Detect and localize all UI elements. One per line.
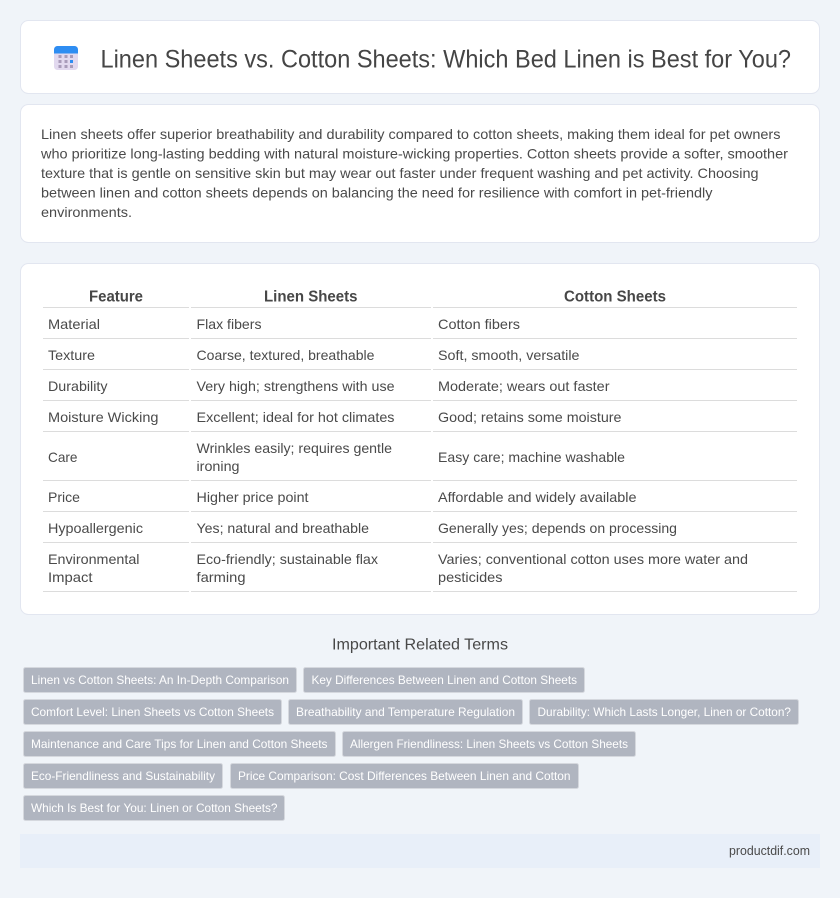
tag: [24, 700, 282, 724]
row: care: Easy care; machine washable: [438, 449, 625, 465]
row: price: [48, 489, 637, 505]
text block: introduction paragraph: texture that is gentle on sensitive skin but may wear out faster under frequent washing and pet activity. Choosing: [41, 165, 758, 181]
row: price: Price: [48, 489, 80, 505]
row: texture: Texture: [48, 347, 95, 363]
row: price: Higher price point: [196, 489, 309, 505]
row: care: [48, 440, 625, 474]
tag: [24, 732, 336, 756]
row: material: Material: [48, 316, 100, 332]
text block: introduction paragraph: [40, 126, 788, 220]
row: moisture wicking: Moisture Wicking: [48, 409, 158, 425]
panel: related term tags: [24, 668, 798, 820]
text block: introduction paragraph: Linen sheets offer superior breathability and durability compared to cotton sheets, making them ideal for pet owners: [41, 126, 780, 142]
row: hypoallergenic: Hypoallergenic: [48, 520, 143, 536]
row: care: ironing: [196, 458, 240, 474]
tag: [230, 764, 578, 788]
row: durability: Very high; strengthens with use: [196, 378, 395, 394]
tag: [24, 796, 284, 820]
row: texture: Soft, smooth, versatile: [438, 347, 580, 363]
row: hypoallergenic: Generally yes; depends on processing: [438, 520, 677, 536]
row: environmental impact: [48, 551, 748, 585]
tag: Breathability and Temperature Regulation: [296, 705, 515, 719]
row: environmental impact: farming: [196, 569, 246, 585]
tag: Price Comparison: Cost Differences Between Linen and Cotton: [238, 769, 570, 783]
row: material: Flax fibers: [196, 316, 262, 332]
row: moisture wicking: Good; retains some moisture: [438, 409, 622, 425]
row: durability: Durability: [48, 378, 108, 394]
row: environmental impact: Environmental: [48, 551, 140, 567]
row: care: Care: [48, 449, 78, 465]
panel: footer: [20, 834, 820, 868]
row: moisture wicking: Excellent; ideal for hot climates: [196, 409, 394, 425]
table header: Feature: [89, 289, 143, 306]
row: moisture wicking: [48, 409, 622, 425]
tag: Allergen Friendliness: Linen Sheets vs Cotton Sheets: [350, 737, 628, 751]
row: texture: Coarse, textured, breathable: [196, 347, 375, 363]
tag: Comfort Level: Linen Sheets vs Cotton Sheets: [31, 705, 274, 719]
tag: [288, 700, 522, 724]
tag: [304, 668, 584, 692]
row: environmental impact: pesticides: [438, 569, 502, 585]
tag: Maintenance and Care Tips for Linen and Cotton Sheets: [31, 737, 328, 751]
tag: Linen vs Cotton Sheets: An In-Depth Comparison: [31, 673, 289, 687]
row: durability: [48, 378, 610, 394]
tag: Durability: Which Lasts Longer, Linen or Cotton?: [538, 705, 791, 719]
tag: [24, 668, 296, 692]
tag: Which Is Best for You: Linen or Cotton Sheets?: [31, 801, 278, 815]
table header: Linen Sheets: [264, 289, 358, 306]
tag: [342, 732, 636, 756]
panel: comparison table: [20, 264, 820, 614]
tag: [530, 700, 798, 724]
tag: Eco-Friendliness and Sustainability: [31, 769, 215, 783]
row: texture: [48, 347, 580, 363]
row: environmental impact: Varies; conventional cotton uses more water and: [438, 551, 748, 567]
heading: important related terms: Important Related Terms: [332, 636, 508, 654]
row: hypoallergenic: [48, 520, 677, 536]
panel: header: [20, 20, 820, 94]
tag: [24, 764, 222, 788]
tag: Key Differences Between Linen and Cotton Sheets: [312, 673, 577, 687]
footer source text: productdif.com: [729, 844, 810, 858]
row: environmental impact: Eco-friendly; sustainable flax: [196, 551, 378, 567]
table header: Cotton Sheets: [564, 289, 666, 306]
row: care: Wrinkles easily; requires gentle: [196, 440, 392, 456]
row: material: Cotton fibers: [438, 316, 520, 332]
text block: introduction paragraph: environments.: [41, 204, 132, 220]
icon: calendar: [54, 46, 78, 70]
row: hypoallergenic: Yes; natural and breathable: [196, 520, 369, 536]
row: material: [48, 316, 520, 332]
title: Linen Sheets vs. Cotton Sheets: Which Bed Linen is Best for You?: [100, 46, 791, 74]
text block: introduction paragraph: who prioritize long-lasting bedding with natural moisture-wicking properties. Cotton sheets provide a softer, smoother: [40, 146, 788, 162]
row: environmental impact: Impact: [48, 569, 93, 585]
text block: introduction paragraph: between linen and cotton sheets depends on balancing the need for resilience with comfort in pet-friendly: [41, 184, 712, 200]
row: durability: Moderate; wears out faster: [438, 378, 610, 394]
table header: [89, 289, 666, 306]
row: price: Affordable and widely available: [438, 489, 637, 505]
panel: introduction: [20, 104, 820, 242]
